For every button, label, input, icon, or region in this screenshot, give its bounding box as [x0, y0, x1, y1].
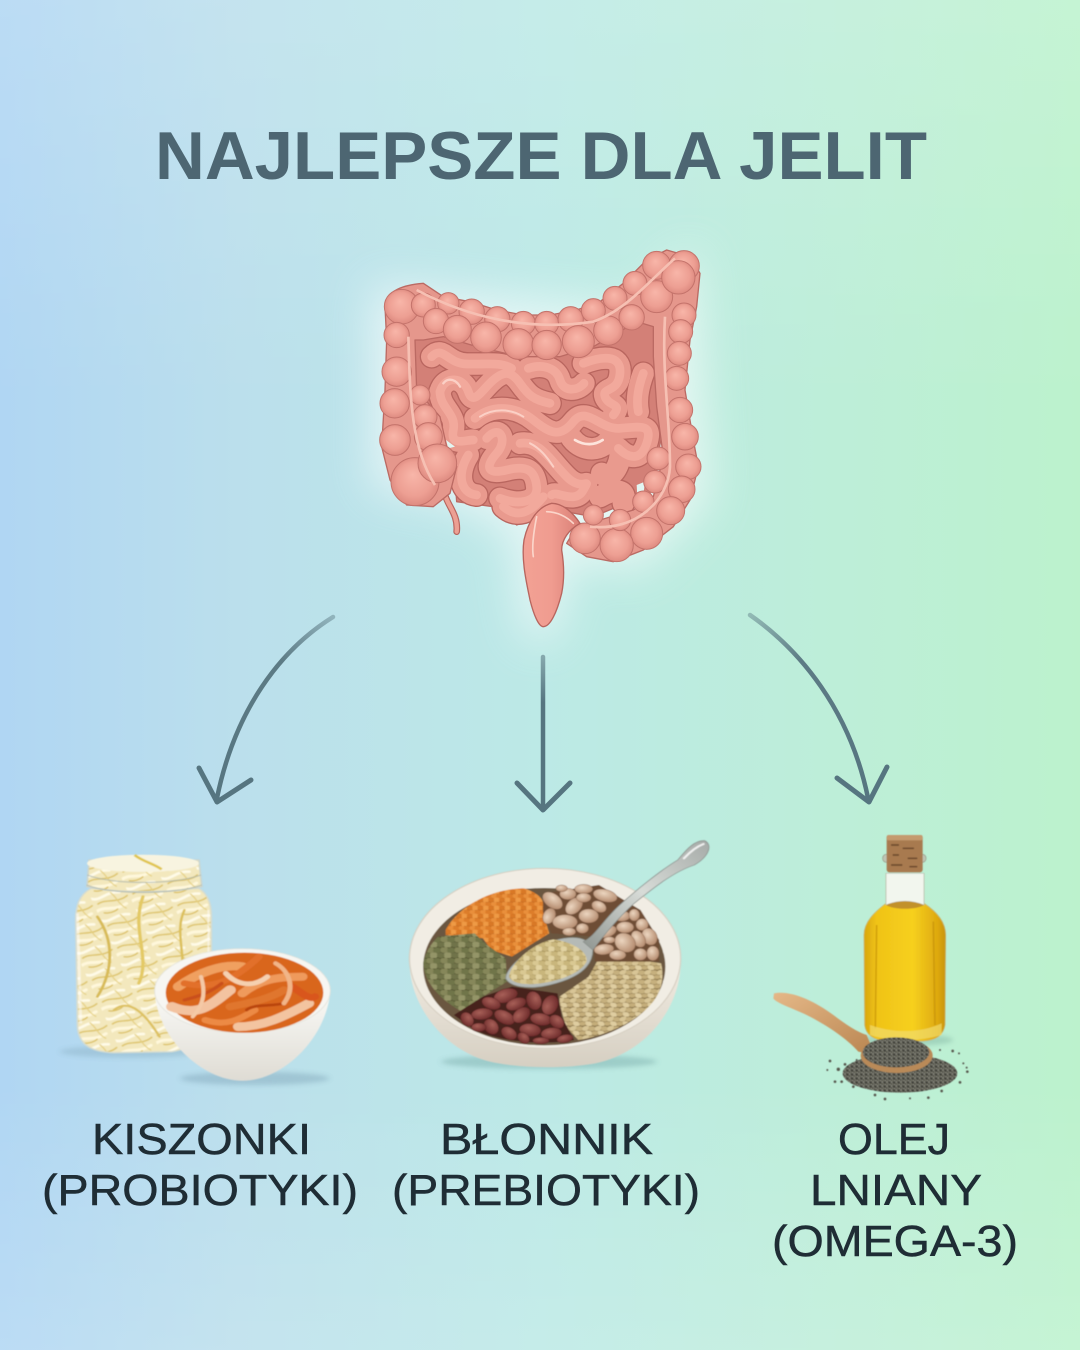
soft glow behind intestine — [372, 245, 710, 640]
label: olej lniany: OLEJ — [838, 1115, 950, 1164]
label: olej lniany — [772, 1115, 1018, 1266]
arrow: to right food — [750, 615, 887, 802]
appendix — [445, 495, 457, 532]
title: NAJLEPSZE DLA JELIT — [155, 118, 927, 194]
label: kiszonki: (PROBIOTYKI) — [42, 1166, 358, 1215]
large intestine colon — [380, 250, 701, 562]
white bowl with kimchi — [155, 949, 330, 1081]
red kidney beans — [454, 985, 574, 1045]
orange lentils — [446, 888, 549, 957]
wooden spoon with chia seeds — [773, 993, 969, 1100]
small gaps in the intestine — [446, 440, 645, 497]
food: sauerkraut jar and kimchi bowl — [60, 841, 709, 1085]
label: blonnik — [392, 1115, 700, 1215]
label: blonnik: BŁONNIK — [440, 1115, 653, 1164]
green lentils — [423, 933, 507, 1014]
icon: intestines illustration — [380, 250, 701, 627]
arrow: to centre food — [517, 657, 570, 810]
spoon with legumes — [506, 841, 709, 987]
jar of sauerkraut — [76, 855, 211, 1053]
rectum — [523, 503, 580, 627]
label: olej lniany: (OMEGA-3) — [772, 1217, 1018, 1266]
food: flaxseed oil bottle and seeds — [773, 835, 969, 1100]
bowl of legumes — [410, 841, 709, 1069]
label: blonnik: (PREBIOTYKI) — [392, 1166, 700, 1215]
label: kiszonki — [42, 1115, 358, 1215]
oil bottle — [864, 835, 946, 1041]
tan legumes — [560, 958, 662, 1040]
label: olej lniany: LNIANY — [810, 1166, 982, 1215]
small intestine — [410, 320, 665, 525]
arrow: to left food — [199, 617, 333, 802]
pinto beans — [539, 884, 660, 962]
label: kiszonki: KISZONKI — [92, 1115, 311, 1164]
